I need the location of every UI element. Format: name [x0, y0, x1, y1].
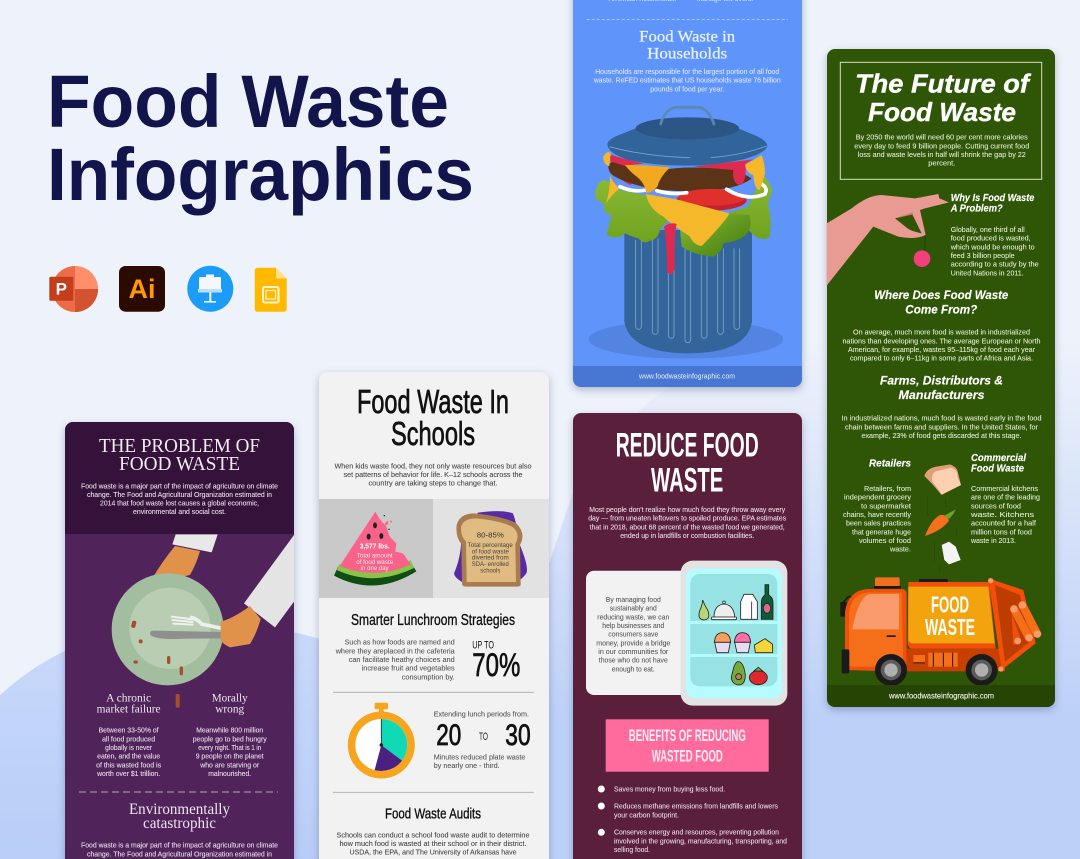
section: food waste audits: Food Waste Audits [385, 805, 481, 822]
panel: food waste in households [573, 0, 802, 387]
section: smarter lunchroom strategies: Smarter Lunchroom Strategies [351, 612, 515, 629]
heading [616, 427, 759, 500]
section: why is food waste a problem: feed 3 billion people [951, 251, 1015, 260]
column: retailers: waste. [889, 545, 911, 554]
section: farms, distributors and manufacturers [842, 376, 1042, 440]
stat: watermelon: Total amount [357, 553, 393, 560]
stat: watermelon: of food waste [356, 559, 394, 566]
stat: 20 to 30 minutes: Minutes reduced plate waste [434, 752, 525, 761]
section: food waste audits: how much food is wasted at their school or in their district. [340, 839, 526, 848]
title box: every day to feed 9 billion people. Cutting current food [854, 141, 1029, 150]
cut-off text at top [608, 0, 754, 3]
section: smarter lunchroom strategies: Such as how foods are named and [345, 638, 455, 647]
intro text: Households are responsible for the largest portion of all food [595, 67, 779, 76]
section: farms, distributors and manufacturers: chain between farms and suppliers. In the United States, for [845, 422, 1038, 431]
intro text: Most people don't realize how much food they throw away every [589, 505, 786, 514]
heading [357, 383, 509, 452]
title [47, 60, 474, 216]
column: retailers [843, 458, 912, 554]
section: environmentally catastrophic [81, 801, 278, 858]
banner: benefits: WASTED FOOD [652, 747, 723, 766]
section: smarter lunchroom strategies: can facilitate heathy choices and [349, 655, 455, 664]
section: why is food waste a problem: United Nations in 2011. [951, 268, 1024, 277]
column: commercial food waste: Commercial kitchens [971, 484, 1038, 493]
section: smarter lunchroom strategies: increase fruit and vegetables [362, 664, 455, 673]
section: where does food waste come from: Come From? [905, 304, 977, 316]
panel: reduce food waste [573, 413, 802, 859]
intro text: country are taking steps to change that. [368, 479, 498, 488]
intro text: set patterns of behavior for life. K–12 schools across the [344, 470, 522, 479]
column: commercial food waste: million tons of food [971, 527, 1032, 536]
column: a chronic market failure: Between 33-50% of [99, 726, 159, 735]
intro text: waste. ReFED estimates that US households waste 76 billion [593, 76, 781, 85]
callout card: By managing food [606, 595, 661, 604]
section: where does food waste come from [842, 290, 1040, 363]
stat: bread: of food waste [472, 548, 509, 555]
stat: watermelon [319, 499, 433, 598]
stat: watermelon: in one day [361, 565, 389, 572]
section: why is food waste a problem: according to a study by the [951, 260, 1039, 269]
callout card: reducing waste, we can [597, 612, 669, 621]
column: a chronic market failure: globally is never [105, 743, 153, 752]
bullet list: your carbon footprint. [614, 810, 679, 819]
icon: Keynote [187, 266, 233, 312]
banner: benefits [606, 719, 769, 772]
column: retailers: volumes of food [859, 536, 911, 545]
icon: Illustrator: Ai [128, 274, 156, 304]
callout card: those who do not have [599, 656, 668, 665]
column: a chronic market failure: market failure [97, 704, 161, 716]
section: farms, distributors and manufacturers: In industrialized nations, much food is wasted early in the food [842, 414, 1042, 423]
illustration: hand dangling berry [827, 194, 949, 286]
column: retailers: independent grocery [844, 493, 911, 502]
intro text: When kids waste food, they not only waste resources but also [334, 461, 532, 470]
column: commercial food waste: waste. Kitchens [970, 510, 1034, 519]
footer band: www.foodwasteinfographic.com [888, 691, 994, 700]
icon: Google Slides [255, 268, 287, 312]
column: morally wrong: malnourished. [208, 769, 251, 778]
column: a chronic market failure: of this wasted food is [96, 760, 161, 769]
stat: 20 to 30 minutes: 30 [505, 719, 531, 752]
icon: Illustrator [119, 266, 165, 312]
title box [840, 62, 1042, 179]
column: a chronic market failure: worth over $1 trillion. [96, 769, 160, 778]
column: morally wrong: Meanwhile 800 million [196, 726, 263, 735]
heading: WASTE [651, 462, 723, 500]
stat: up to 70%: UP TO [472, 639, 494, 651]
title: Infographics [47, 133, 474, 216]
bullet list: Conserves energy and resources, preventing pollution [614, 828, 779, 837]
column: retailers: that generate huge [852, 527, 911, 536]
intro text [81, 482, 278, 516]
column: a chronic market failure: eaten, and the value [97, 752, 160, 761]
icons: falling food [924, 464, 961, 574]
section: where does food waste come from: American, for example, wastes 95–115kg of food each year [848, 345, 1035, 354]
section: smarter lunchroom strategies: consumption by. [402, 672, 455, 681]
bullet list: selling food. [614, 845, 650, 854]
bullet list: Reduces methane emissions from landfills and lowers [614, 802, 778, 811]
intro text: change. The Food and Agricultural Organization estimated in [87, 490, 272, 499]
panel: the future of food waste [827, 49, 1055, 707]
heading: REDUCE FOOD [616, 427, 759, 465]
icon: stopwatch [348, 703, 415, 778]
illustration: fridge [681, 561, 787, 706]
icon: PowerPoint [49, 266, 98, 312]
stat: watermelon: 3,577 lbs. [360, 541, 390, 550]
column: morally wrong: people go to bed hungry [193, 734, 267, 743]
section: where does food waste come from: Where Does Food Waste [874, 290, 1009, 302]
callout card: consumers save [608, 630, 658, 639]
heading [99, 435, 260, 475]
section: smarter lunchroom strategies: where they areplaced in the cafeteria [335, 646, 455, 655]
title: Food Waste [47, 60, 449, 143]
icon: PowerPoint: P [56, 280, 67, 298]
section: why is food waste a problem [950, 193, 1039, 277]
section: environmentally catastrophic: Environmentally [129, 801, 230, 818]
section: why is food waste a problem: Globally, one third of all [951, 225, 1025, 234]
title box: loss and waste levels in half will shrink the gap by 22 [858, 150, 1026, 159]
column: retailers: chains, have recently [843, 510, 911, 519]
column: retailers: been sales practices [846, 519, 911, 528]
illustration: garbage truck: WASTE [925, 614, 975, 640]
intro text [334, 461, 532, 488]
section: where does food waste come from: nations than developing ones. The average European or North [842, 336, 1040, 345]
section: smarter lunchroom strategies [335, 612, 520, 683]
footer band [827, 685, 1055, 707]
column: a chronic market failure [96, 693, 161, 778]
column: morally wrong: Morally [212, 693, 248, 705]
section: farms, distributors and manufacturers: Farms, Distributors & [880, 376, 1003, 388]
column: commercial food waste: accounted for a half [971, 519, 1037, 528]
footer band [573, 366, 802, 387]
stat: 20 to 30 minutes: by nearly one - third. [434, 761, 500, 770]
callout card [586, 571, 696, 695]
column: commercial food waste: Commercial [971, 453, 1026, 464]
column: a chronic market failure: all food produced [102, 734, 155, 743]
heading: Households [647, 45, 727, 62]
column: retailers: Retailers, from [864, 484, 911, 493]
title box: Food Waste [868, 97, 1016, 127]
callout card: help businesses and [602, 621, 664, 630]
section: why is food waste a problem: which would be enough to [950, 242, 1035, 251]
column: retailers: Retailers [869, 458, 911, 469]
intro text: day — from uneaten leftovers to spoiled produce. EPA estimates [588, 514, 787, 523]
stat: 20 to 30 minutes: Extending lunch periods from. [434, 710, 529, 719]
stat: bread: Total percentage [468, 542, 513, 549]
heading: Schools [391, 415, 475, 452]
section: environmentally catastrophic: change. The Food and Agricultural Organization estimated in [87, 849, 272, 858]
section: why is food waste a problem: Why Is Food Waste [951, 193, 1035, 204]
intro text [593, 67, 781, 93]
stat: bread: schools [480, 567, 500, 574]
column: morally wrong: who are starving or [199, 760, 260, 769]
callout card: enough to eat. [612, 664, 655, 673]
column: commercial food waste: waste in 2013. [970, 536, 1016, 545]
intro text: pounds of food per year. [650, 84, 724, 93]
column: commercial food waste: are one of the leading [971, 493, 1040, 502]
callout card: money, provide a bridge [596, 638, 670, 647]
column: morally wrong [193, 693, 267, 778]
heading: Food Waste In [357, 383, 509, 420]
stat: bread: 80-85% [477, 533, 504, 540]
section: environmentally catastrophic: catastrophic [143, 815, 216, 832]
stat: up to 70% [472, 639, 520, 683]
section: why is food waste a problem: A Problem? [950, 203, 1003, 214]
intro text: ended up in landfills or combustion facilities. [620, 531, 754, 540]
section: environmentally catastrophic: Food waste is a major part of the impact of agriculture on climate [81, 841, 278, 850]
column: a chronic market failure: A chronic [106, 693, 151, 705]
stat: 20 to 30 minutes: TO [479, 731, 488, 743]
illustration: overflowing trash can [589, 107, 783, 359]
heading: THE PROBLEM OF [99, 435, 260, 457]
intro text [588, 505, 787, 540]
title box: By 2050 the world will need 60 per cent more calories [856, 133, 1028, 142]
column: morally wrong: 9 people on the planet [196, 752, 264, 761]
section: why is food waste a problem: food produced is wasted, [951, 234, 1031, 243]
stat: bread: SDA- enrolled [472, 561, 509, 568]
section: food waste audits: Schools can conduct a school food waste audit to determine [336, 830, 530, 839]
intro text: 2014 that food waste lost causes a global economic, [100, 499, 259, 508]
heading: Food Waste in [639, 29, 735, 46]
panel: food waste in schools [319, 372, 549, 859]
intro text: Food waste is a major part of the impact of agriculture on climate [81, 482, 278, 490]
section: food waste audits [336, 805, 530, 857]
stat: bread [433, 499, 549, 598]
bullet list: involved in the growing, manufacturing, transporting, and [614, 836, 787, 845]
stat: 20 to 30 minutes [434, 710, 531, 770]
column: morally wrong: every night. That is 1 in [198, 743, 261, 752]
callout card: in our communities for [598, 647, 669, 656]
stat: up to 70%: 70% [472, 647, 520, 683]
column: commercial food waste: sources of food [971, 501, 1021, 510]
illustration: garbage truck: FOOD [931, 591, 969, 617]
section: farms, distributors and manufacturers: example, 23% of food gets discarded at this stage. [862, 431, 1022, 440]
column: retailers: to supermarket [861, 501, 912, 510]
section: food waste audits: USDA, the EPA, and The University of Arkansas have [350, 848, 516, 857]
panel: the problem of food waste [65, 422, 294, 859]
section: farms, distributors and manufacturers: Manufacturers [898, 390, 984, 402]
illustration: plate held by hands [112, 534, 294, 708]
intro text: that in 2018, about 68 percent of the wasted food we generated, [590, 522, 785, 531]
title box: The Future of [855, 68, 1031, 98]
section: where does food waste come from: On average, much more food is wasted in industrialized [853, 328, 1030, 337]
intro text: environmental and social cost. [133, 507, 226, 516]
banner: benefits: BENEFITS OF REDUCING [629, 726, 746, 745]
column: commercial food waste: Food Waste [971, 463, 1024, 474]
column: commercial food waste [970, 453, 1040, 545]
stat: 20 to 30 minutes: 20 [436, 719, 461, 752]
section: where does food waste come from: compared to only 6–11kg in some parts of Africa and Asia. [850, 354, 1033, 363]
callout card: sustainably and [610, 604, 657, 613]
column: morally wrong: wrong [215, 704, 244, 716]
bullet list: Saves money from buying less food. [614, 784, 725, 793]
title box: percent. [928, 159, 955, 168]
stat: bread: diverted from [472, 555, 509, 562]
footer band: www.foodwasteinfographic.com [638, 371, 735, 380]
bullet list [598, 784, 787, 854]
heading [639, 29, 735, 62]
heading: FOOD WASTE [119, 453, 240, 475]
illustration: garbage truck [840, 577, 1041, 686]
software icons row [49, 266, 287, 312]
